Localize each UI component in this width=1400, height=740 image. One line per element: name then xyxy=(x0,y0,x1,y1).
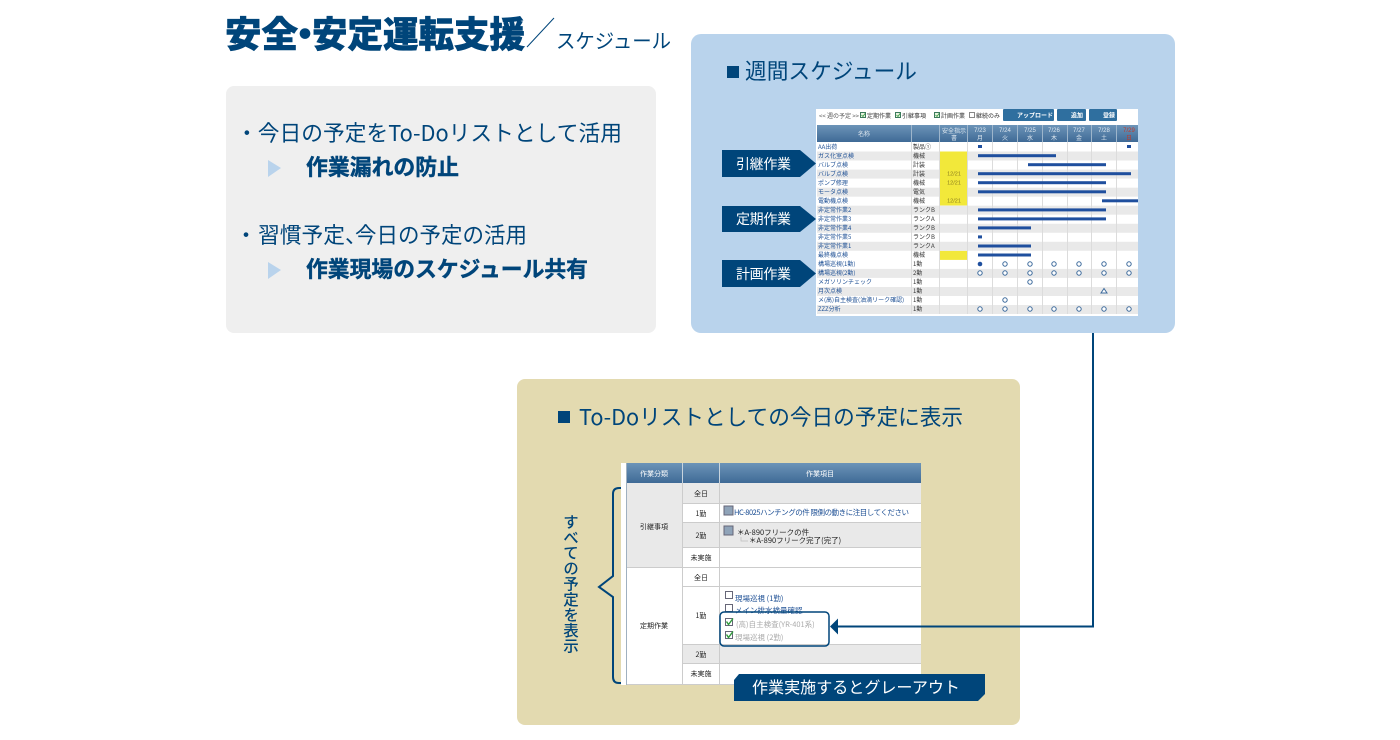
row names: 非定常作業1 xyxy=(818,241,851,250)
table header: 木 xyxy=(1051,133,1057,142)
tag: planned work: 計画作業 xyxy=(736,264,791,284)
table header xyxy=(817,125,1138,142)
shift labels: 2勤 xyxy=(696,650,706,660)
table header: 7/29 xyxy=(1123,128,1135,134)
row categories: 電気 xyxy=(913,187,925,196)
category labels: 引継事項 xyxy=(640,522,668,532)
handover item 2: ＊A-890フリーク完了(完了) xyxy=(749,535,841,546)
row names: メガソリンチェック xyxy=(818,277,872,286)
row categories: 製品① xyxy=(913,142,931,151)
row shading xyxy=(627,483,921,663)
row categories xyxy=(913,142,935,313)
row categories: ランクB xyxy=(913,232,935,241)
row names xyxy=(818,142,904,313)
bullet: today's schedule as to-do list: ・今日の予定をTo-Doリストとして活用 xyxy=(236,116,622,148)
row categories: 計装 xyxy=(913,160,925,169)
row names: 構場巡視(1勤) xyxy=(818,259,855,268)
bullet: habitual schedule: ・ xyxy=(235,218,257,250)
table header: 火 xyxy=(1002,133,1008,142)
icon: triangle 1 xyxy=(268,160,281,177)
row names: 非定常作業4 xyxy=(818,223,852,232)
title xyxy=(225,6,671,58)
shift labels xyxy=(690,489,712,679)
yellow cell dates: 12/21 xyxy=(947,172,961,178)
toolbar: 登録 xyxy=(1103,110,1115,120)
toolbar: アップロード xyxy=(1017,110,1053,120)
table header: 日 xyxy=(1126,133,1132,142)
shift labels: 1勤 xyxy=(696,611,706,621)
row categories: ランクB xyxy=(913,223,935,232)
table header xyxy=(627,463,921,483)
tag: handover work: 引継作業 xyxy=(736,154,791,174)
handover item 1: HC-8025ハンチングの件 限側の動きに注目してください xyxy=(734,507,909,518)
table header: 名称 xyxy=(858,129,870,138)
title: ・ xyxy=(287,6,323,58)
table header: 月 xyxy=(977,133,983,142)
tag: handover work xyxy=(722,150,816,177)
table header: 作業項目 xyxy=(806,469,834,479)
row names: 非定常作業3 xyxy=(818,214,851,223)
toolbar: 定期作業 xyxy=(867,111,891,120)
table header: 7/25 xyxy=(1024,128,1036,134)
row names: モータ点検 xyxy=(818,187,848,196)
row names: 非定常作業5 xyxy=(818,232,851,241)
checklist: 現場巡視 (2勤) xyxy=(735,632,783,643)
inspection markers xyxy=(978,262,1131,311)
result: share site schedule: 作業現場のスケジュール共有 xyxy=(306,252,588,284)
table header: 7/28 xyxy=(1098,128,1110,134)
row names: ガス化室点検 xyxy=(818,151,854,160)
row categories: 機械 xyxy=(913,196,925,205)
icon: document 2 xyxy=(724,526,733,535)
row names: ポンプ修理 xyxy=(818,178,848,187)
row names: バルブ点検 xyxy=(818,169,848,178)
row names: 電動機点検 xyxy=(818,196,848,205)
title: 安定運転支援 xyxy=(312,6,525,58)
row categories: 機械 xyxy=(913,151,925,160)
panel: to-do list xyxy=(517,379,1020,725)
bullet: habitual schedule: 習慣予定 xyxy=(258,218,345,250)
row categories: 機械 xyxy=(913,250,925,259)
row categories: ランクA xyxy=(913,241,935,250)
tag: planned work xyxy=(722,260,816,287)
table header: 7/26 xyxy=(1048,128,1060,134)
toolbar: 計画作業 xyxy=(941,111,965,120)
shift labels: 2勤 xyxy=(696,531,706,541)
screenshot: today's schedule table xyxy=(621,463,921,685)
toolbar xyxy=(819,109,1117,121)
row categories: 1勤 xyxy=(913,295,922,304)
row categories: 1勤 xyxy=(913,304,922,313)
icon: brace xyxy=(599,488,624,683)
tag: periodic work: 定期作業 xyxy=(736,209,791,229)
panel: weekly schedule xyxy=(691,34,1175,333)
yellow cell dates: 12/21 xyxy=(947,180,961,186)
table header: 7/27 xyxy=(1073,128,1085,134)
checklist: 現場巡視 (1勤) xyxy=(735,593,783,604)
table header: 金 xyxy=(1076,133,1082,142)
screenshot: weekly schedule table xyxy=(816,109,1138,316)
table row shading xyxy=(817,152,1138,314)
table header: 作業分類 xyxy=(640,469,668,479)
heading: to-do display: To-Doリストとしての今日の予定に表示 xyxy=(579,400,963,432)
shift labels: 1勤 xyxy=(696,509,706,519)
row categories: 計装 xyxy=(913,169,925,178)
screenshot: today's schedule table: 定期作業 xyxy=(640,621,668,631)
arrow: weekly schedule to to-do xyxy=(830,333,1093,634)
toolbar: 引継事項 xyxy=(902,111,926,120)
row names: AA出荷 xyxy=(818,142,837,151)
title: 安全 xyxy=(225,6,298,58)
bullet: habitual schedule xyxy=(235,218,527,250)
result: prevent omissions: 作業漏れの防止 xyxy=(306,150,459,182)
table header: 土 xyxy=(1101,133,1107,142)
highlight box xyxy=(720,612,829,646)
row names: 最終機点検 xyxy=(818,250,848,259)
row names: 構場巡視(2勤) xyxy=(818,268,855,277)
toolbar: 継続のみ xyxy=(976,111,1000,120)
row names: バルブ点検 xyxy=(818,160,848,169)
row categories: 2勤 xyxy=(913,268,922,277)
yellow cell dates xyxy=(947,172,961,204)
checklist: メイン排水検量確認 xyxy=(735,605,803,616)
toolbar: 追加 xyxy=(1071,110,1083,120)
icon: document 1 xyxy=(724,506,733,515)
checklist xyxy=(726,592,815,643)
callout: grayed out when done: 作業実施するとグレーアウト xyxy=(752,674,960,698)
checklist: (高)自主検査(YR-401系) xyxy=(736,619,815,630)
row categories: ランクB xyxy=(913,205,935,214)
row names: 月次点検 xyxy=(818,286,842,295)
row categories: 1勤 xyxy=(913,277,922,286)
title: スケジュール xyxy=(556,25,671,54)
row categories: 機械 xyxy=(913,178,925,187)
shift labels: 未実施 xyxy=(690,553,712,563)
shift labels: 未実施 xyxy=(690,669,712,679)
row categories: 1勤 xyxy=(913,259,922,268)
bullet: habitual schedule: 、 xyxy=(345,218,367,250)
table header: 書 xyxy=(951,133,957,142)
row categories: 1勤 xyxy=(913,286,922,295)
row categories: ランクA xyxy=(913,214,935,223)
yellow cell dates: 12/21 xyxy=(947,198,961,204)
handover item 2: ＊A-890フリークの件 xyxy=(737,527,810,538)
bullet: habitual schedule: 今日の予定の活用 xyxy=(355,218,527,250)
table header: 7/24 xyxy=(999,128,1011,134)
heading: weekly schedule: 週間スケジュール xyxy=(745,54,917,86)
gantt bars xyxy=(978,145,1138,256)
row names: 非定常作業2 xyxy=(818,205,852,214)
table header: 安全指示 xyxy=(942,126,966,135)
vertical label: すべての予定を表示 xyxy=(560,514,582,654)
row names: ZZZ分析 xyxy=(818,304,841,313)
shift labels: 全日 xyxy=(694,489,708,499)
panel: benefits xyxy=(226,86,656,333)
handover item 2 xyxy=(737,527,841,546)
table header: 水 xyxy=(1027,133,1033,142)
toolbar: << 週の予定 >> xyxy=(819,111,860,120)
tag: periodic work xyxy=(722,206,816,232)
row names: メ(高)自主検査(油滴リーク確認) xyxy=(818,295,904,304)
shift labels: 全日 xyxy=(694,573,708,583)
table header: 7/23 xyxy=(974,128,986,134)
yellow safety cells xyxy=(940,152,968,260)
icon: triangle 2 xyxy=(268,262,281,279)
